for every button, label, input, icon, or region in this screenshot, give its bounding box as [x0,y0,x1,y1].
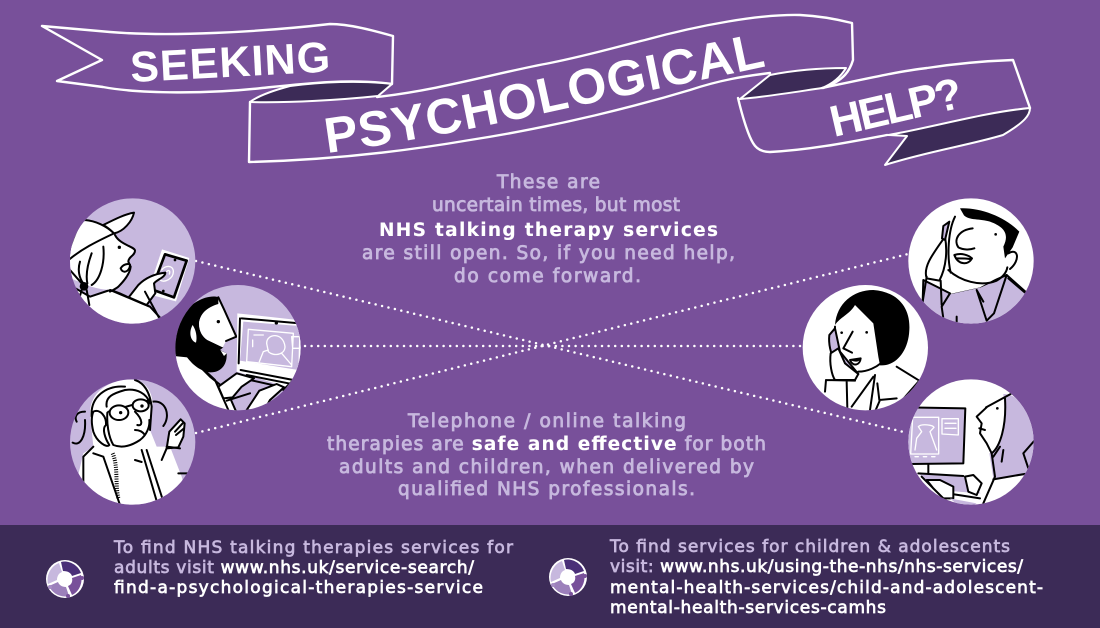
safety text block: therapies are safe and effective for both [327,434,766,455]
illustration: older woman on landline phone [70,379,195,510]
safety text block [327,411,766,500]
ribbon fold: second [740,68,846,99]
intro text block: These are [496,172,600,193]
intro text block: NHS talking therapy services [379,220,718,241]
intro text block: are still open. So, if you need help, [362,243,735,264]
footer text: adult services: To find NHS talking therapies services for [113,538,513,558]
footer text: adult services [113,538,513,598]
intro text block: uncertain times, but most [432,195,680,216]
footer text: adult services: adults visit www.nhs.uk/service-search/ [114,558,474,578]
ribbon tail: help [885,108,1030,165]
ribbon fold: first [250,82,392,102]
footer text: children services [609,537,1043,618]
ribbon: psychological [249,15,853,162]
illustration: woman with short black hair on phone [803,285,928,412]
logo: right [549,558,587,596]
safety text block: adults and children, when delivered by [339,457,754,478]
footer text: adult services: find-a-psychological-therapies-service [114,578,483,598]
dotted connector lines [196,254,908,433]
ribbon: help [738,60,1030,152]
title word: seeking: SEEKING [129,34,331,92]
title word: psychological: PSYCHOLOGICAL [325,36,765,153]
footer text: children services: To find services for children & adolescents [609,537,1010,557]
intro text block [362,172,735,287]
title banner [40,14,1032,166]
safety text block: qualified NHS professionals. [398,479,695,500]
footer band [0,525,1100,628]
safety text block: Telephone / online talking [407,411,686,432]
title word: help: HELP? [825,69,967,147]
ribbon: seeking [42,24,393,92]
intro text block: do come forward. [454,266,641,287]
footer text: children services: mental-health-services/child-and-adolescent- [610,578,1043,598]
logo: left [46,560,84,598]
illustration: bearded man on laptop video call [173,285,303,417]
illustration: woman in headscarf at computer [907,379,1035,510]
footer text: children services: visit: www.nhs.uk/using-the-nhs/nhs-services/ [610,557,1023,577]
illustration: man on mobile phone [908,198,1034,333]
illustration: woman with smartphone [67,198,195,333]
footer text: children services: mental-health-services-camhs [610,598,886,618]
